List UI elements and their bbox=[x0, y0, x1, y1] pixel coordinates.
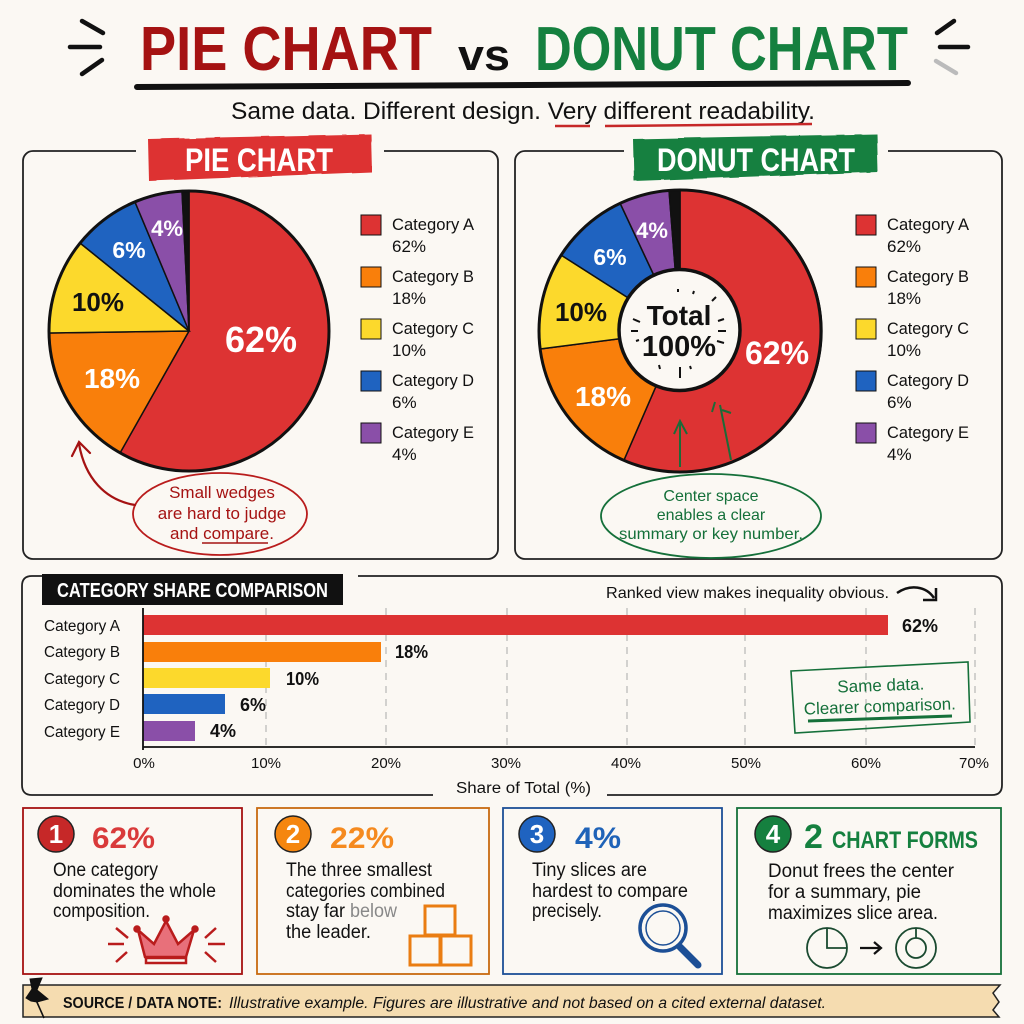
legend: donut chart: 10% bbox=[887, 341, 921, 360]
legend: donut chart: 62% bbox=[887, 237, 921, 256]
badge 2: 2 bbox=[286, 819, 300, 849]
text: card 2: The three smallest bbox=[286, 860, 433, 881]
bar chart: 62% bbox=[902, 616, 938, 636]
text: card 1: One category bbox=[53, 860, 158, 881]
legend: pie chart: 10% bbox=[392, 341, 426, 360]
title underline bbox=[137, 83, 908, 87]
bar chart: Category B bbox=[44, 644, 120, 661]
legend: donut chart: 6% bbox=[887, 393, 912, 412]
card 1: 62% bbox=[23, 808, 242, 974]
donut chart: 100% bbox=[642, 331, 716, 363]
callout: small wedges: are hard to judge bbox=[158, 504, 286, 523]
callout: center space: enables a clear bbox=[657, 507, 766, 524]
axis labels: Share of Total (%) bbox=[456, 780, 591, 797]
legend: pie chart: 18% bbox=[392, 289, 426, 308]
card 2: 22% bbox=[257, 808, 489, 974]
note: ranked view: Ranked view makes inequality obvious. bbox=[606, 585, 889, 602]
card 3: 4% bbox=[503, 808, 722, 974]
legend: donut chart: Category C bbox=[887, 319, 969, 338]
arrow: to small wedges bbox=[72, 442, 135, 505]
bar chart: Category A bbox=[44, 618, 121, 635]
heading: donut chart tag bbox=[624, 134, 888, 181]
arrows: to donut center bbox=[674, 402, 731, 467]
callout: small wedges bbox=[133, 473, 307, 555]
source note banner: Illustrative example. Figures are illustrative and not based on a cited external dataset. bbox=[229, 995, 826, 1012]
panel: pie chart bbox=[23, 134, 498, 559]
axis labels bbox=[133, 755, 989, 797]
heading: pie chart tag: PIE CHART bbox=[185, 142, 333, 178]
stat 2 chart forms bbox=[804, 818, 978, 856]
source note banner: SOURCE / DATA NOTE: bbox=[63, 995, 222, 1012]
legend: pie chart: Category D bbox=[392, 371, 474, 390]
text: card 2: the leader. bbox=[286, 922, 371, 943]
text: card 1: composition. bbox=[53, 901, 150, 922]
legend: donut chart bbox=[856, 215, 970, 464]
text: card 1 bbox=[53, 860, 216, 922]
title bbox=[140, 15, 908, 84]
pie chart: 10% bbox=[72, 287, 124, 317]
callout: clearer comparison: Same data. bbox=[837, 674, 925, 697]
legend: donut chart: Category A bbox=[887, 215, 970, 234]
title: vs bbox=[458, 31, 510, 80]
callout: clearer comparison bbox=[791, 662, 970, 733]
badge 2 bbox=[275, 816, 311, 852]
donut chart: 62% bbox=[745, 335, 809, 371]
center burst marks bbox=[631, 289, 726, 378]
axis labels: 10% bbox=[251, 755, 281, 772]
stat 22%: 22% bbox=[330, 822, 394, 855]
card 4: 2 chart forms bbox=[737, 808, 1001, 974]
legend: donut chart: Category D bbox=[887, 371, 969, 390]
panel: category share comparison bbox=[22, 574, 1002, 797]
badge 3 bbox=[519, 816, 555, 852]
badge 1: 1 bbox=[49, 819, 63, 849]
text: card 3: Tiny slices are bbox=[532, 860, 647, 881]
heading: bar chart tag: CATEGORY SHARE COMPARISON bbox=[57, 580, 328, 602]
bar chart: Category D bbox=[44, 697, 120, 714]
text: card 4: maximizes slice area. bbox=[768, 903, 938, 924]
bar chart: Category E bbox=[44, 724, 120, 741]
pie chart: 4% bbox=[151, 216, 183, 241]
badge 3: 3 bbox=[530, 819, 544, 849]
donut chart: 10% bbox=[555, 297, 607, 327]
text: card 4: Donut frees the center bbox=[768, 861, 955, 882]
title: PIE CHART bbox=[140, 15, 432, 84]
legend: pie chart bbox=[361, 215, 475, 464]
callout: small wedges: Small wedges bbox=[169, 483, 275, 502]
text: card 4: for a summary, pie bbox=[768, 882, 921, 903]
axis labels: 70% bbox=[959, 755, 989, 772]
callout: center space bbox=[601, 474, 821, 558]
heading: pie chart tag bbox=[136, 134, 384, 181]
stat 62%: 62% bbox=[92, 822, 155, 855]
icon: pie to donut bbox=[807, 928, 936, 968]
title: DONUT CHART bbox=[535, 15, 908, 84]
legend: pie chart: Category E bbox=[392, 423, 474, 442]
text: card 3: precisely. bbox=[532, 901, 602, 922]
bar chart: 10% bbox=[286, 669, 319, 689]
text: card 4 bbox=[768, 861, 955, 924]
subtitle: Same data. Different design. Very different readability. bbox=[231, 98, 815, 125]
icon: blocks bbox=[410, 906, 471, 965]
donut chart: 18% bbox=[575, 381, 631, 412]
bar chart: Category C bbox=[44, 671, 120, 688]
badge 4: 4 bbox=[766, 819, 781, 849]
callout: clearer comparison: Clearer comparison. bbox=[804, 694, 956, 719]
axis labels: 60% bbox=[851, 755, 881, 772]
text: card 3: hardest to compare bbox=[532, 881, 688, 902]
callout: center space: summary or key number. bbox=[619, 526, 803, 543]
heading: donut chart tag: DONUT CHART bbox=[657, 142, 855, 178]
text: card 1: dominates the whole bbox=[53, 881, 216, 902]
callout: center space: Center space bbox=[663, 488, 759, 505]
pie chart: 6% bbox=[112, 237, 146, 263]
stat 4%: 4% bbox=[575, 822, 621, 855]
callout: small wedges: and compare. bbox=[170, 524, 274, 543]
pie chart: 18% bbox=[84, 363, 140, 394]
bar chart: 18% bbox=[395, 642, 428, 662]
heading: bar chart tag bbox=[42, 574, 343, 605]
stat 2 chart forms: 2 bbox=[804, 818, 823, 856]
donut chart: 6% bbox=[593, 244, 627, 270]
legend: donut chart: 18% bbox=[887, 289, 921, 308]
axis labels: 50% bbox=[731, 755, 761, 772]
icon: crown bbox=[108, 916, 225, 963]
legend: pie chart: 62% bbox=[392, 237, 426, 256]
donut chart bbox=[539, 190, 822, 472]
icon: magnifier bbox=[640, 905, 698, 965]
legend: pie chart: Category C bbox=[392, 319, 474, 338]
legend: pie chart: Category B bbox=[392, 267, 474, 286]
text: card 2 bbox=[286, 860, 445, 943]
donut chart: Total bbox=[647, 300, 711, 331]
bar chart bbox=[44, 608, 975, 750]
text: card 3 bbox=[532, 860, 688, 922]
gridlines bbox=[266, 608, 975, 747]
text: card 2: stay far below bbox=[286, 901, 397, 922]
stat 2 chart forms: CHART FORMS bbox=[832, 827, 978, 854]
legend: donut chart: Category B bbox=[887, 267, 969, 286]
axis labels: 30% bbox=[491, 755, 521, 772]
bar chart: 6% bbox=[240, 695, 266, 715]
legend: pie chart: 4% bbox=[392, 445, 417, 464]
panel: donut chart bbox=[515, 134, 1002, 559]
pie chart: 62% bbox=[225, 319, 297, 360]
title accent marks bbox=[70, 21, 968, 74]
text: card 2: categories combined bbox=[286, 881, 445, 902]
legend: pie chart: 6% bbox=[392, 393, 417, 412]
legend: donut chart: Category E bbox=[887, 423, 969, 442]
axis labels: 0% bbox=[133, 755, 155, 772]
source note banner bbox=[23, 978, 1000, 1018]
badge 4 bbox=[755, 816, 791, 852]
axis labels: 20% bbox=[371, 755, 401, 772]
pie chart bbox=[49, 191, 329, 471]
donut chart: 4% bbox=[636, 218, 668, 243]
icon: pushpin bbox=[26, 978, 48, 1018]
legend: pie chart: Category A bbox=[392, 215, 475, 234]
bar chart: 4% bbox=[210, 721, 236, 741]
legend: donut chart: 4% bbox=[887, 445, 912, 464]
badge 1 bbox=[38, 816, 74, 852]
axis labels: 40% bbox=[611, 755, 641, 772]
